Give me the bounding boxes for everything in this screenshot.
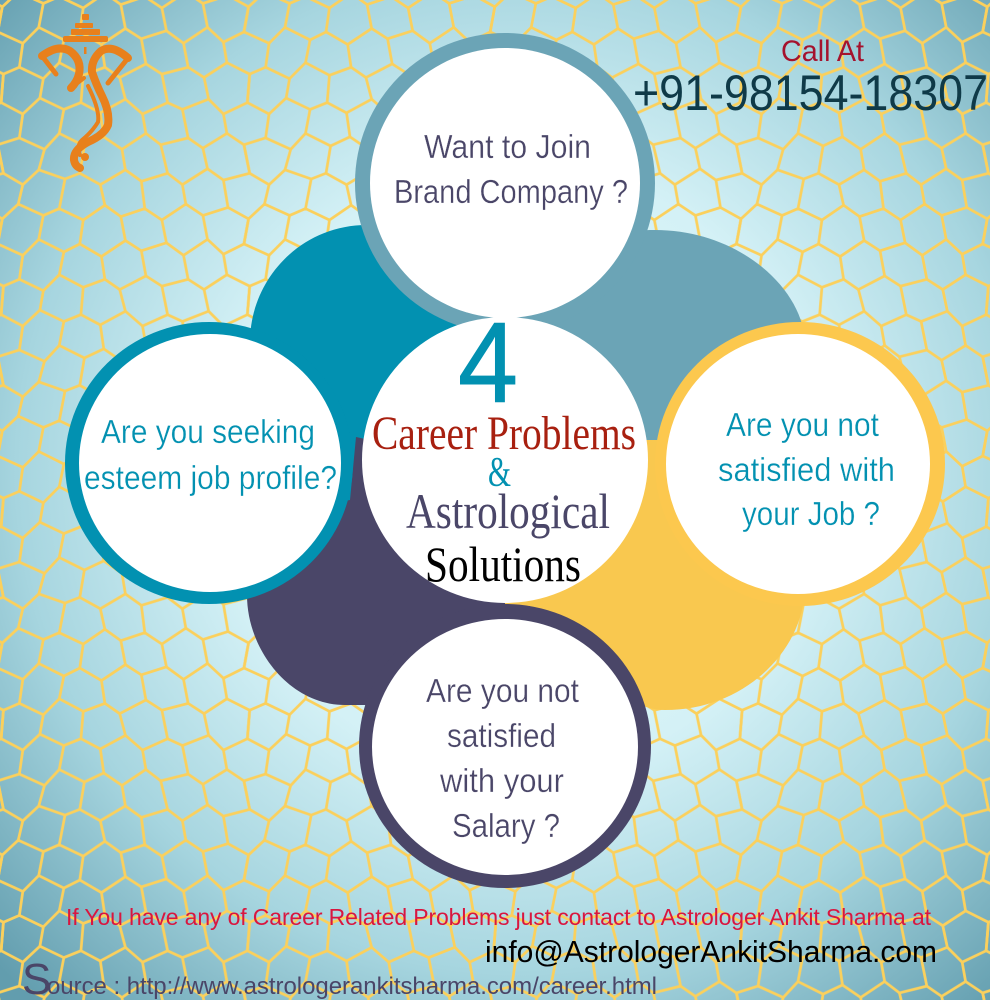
petal: teal upper left xyxy=(250,225,505,560)
numeral 4: 4 xyxy=(458,300,518,427)
question text: your Job ? xyxy=(742,495,880,532)
ring xyxy=(359,604,651,888)
question text xyxy=(84,413,337,496)
ampersand: & xyxy=(488,450,511,496)
contact call to action: If You have any of Career Related Problems just contact to Astrologer Ankit Sharma at xyxy=(66,904,932,930)
question text xyxy=(394,128,628,210)
petal: dark indigo lower left xyxy=(247,437,530,705)
circle: left question xyxy=(65,322,353,604)
title line: solutions: Solutions xyxy=(425,536,581,592)
question text: Want to Join xyxy=(424,128,591,165)
white disc xyxy=(372,619,638,875)
question text: esteem job profile? xyxy=(84,459,337,496)
circle: centre title xyxy=(362,300,648,603)
title line: career problems: Career Problems xyxy=(372,407,636,460)
question text: Are you not xyxy=(426,672,579,709)
email address: info@AstrologerAnkitSharma.com xyxy=(485,934,937,969)
circle: top question xyxy=(355,33,655,333)
question text: with your xyxy=(439,762,564,799)
ring xyxy=(355,33,655,333)
icon: orange Ganesha symbol xyxy=(42,14,128,168)
circle: bottom question xyxy=(359,604,651,888)
title line: astrological: Astrological xyxy=(406,483,610,539)
ring xyxy=(655,322,945,606)
question text: satisfied xyxy=(447,717,556,754)
question text: satisfied with xyxy=(718,451,895,488)
source line: ource : http://www.astrologerankitsharma.com/career.html xyxy=(47,973,657,1000)
white disc xyxy=(666,334,930,594)
phone call block xyxy=(633,35,988,121)
petal: grey-blue upper right xyxy=(505,230,805,460)
ring xyxy=(65,322,353,604)
question text: Are you seeking xyxy=(101,413,315,450)
call at label: Call At xyxy=(781,35,865,68)
question text: Brand Company ? xyxy=(394,173,628,210)
question text: Are you not xyxy=(726,406,879,443)
white disc xyxy=(79,334,341,592)
petal: yellow lower right xyxy=(505,440,805,710)
question text xyxy=(718,406,895,532)
question text: Salary ? xyxy=(452,807,560,844)
circle: right question xyxy=(655,322,945,606)
white disc xyxy=(370,48,640,318)
white disc xyxy=(362,317,648,603)
question text xyxy=(426,672,579,844)
